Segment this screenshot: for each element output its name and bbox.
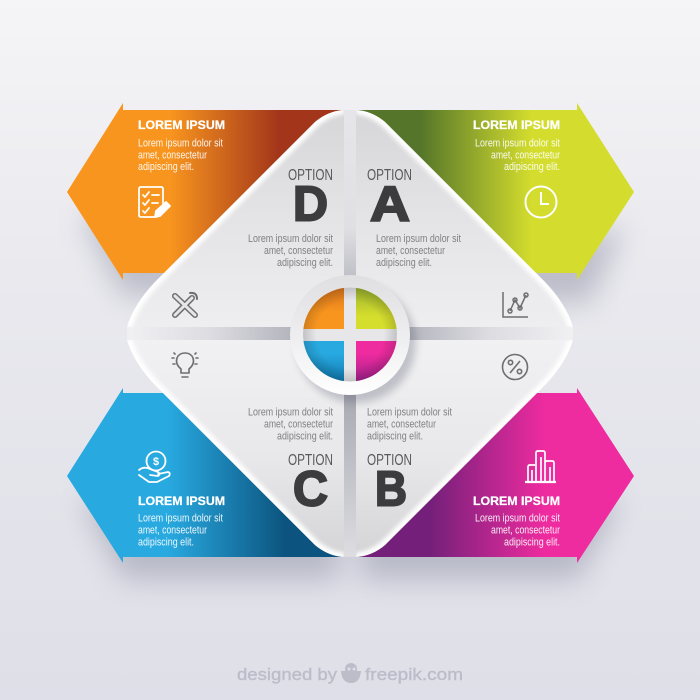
- green arrow text: Lorem ipsum dolor sit: [475, 138, 560, 150]
- card text: adipiscing elit.: [376, 257, 432, 269]
- colored quadrants: [303, 287, 397, 383]
- card shape: [356, 110, 573, 327]
- outer ring: [290, 275, 410, 395]
- magenta arrow text: amet, consectetur: [491, 524, 560, 536]
- card text: Lorem ipsum dolor sit: [367, 406, 452, 418]
- green arrow text: [475, 138, 560, 173]
- panel C: option card: [127, 340, 344, 558]
- option label: OPTION: [288, 452, 333, 469]
- blue arrow shape: [67, 388, 342, 563]
- card text: [376, 233, 461, 269]
- watermark: freepik.com: [365, 665, 463, 684]
- icon: freepik mascot: [341, 663, 361, 683]
- center circle: [290, 275, 416, 403]
- orange arrow shape: [67, 103, 342, 280]
- icon: hand with coin: [139, 452, 170, 482]
- card text: amet, consectetur: [367, 418, 436, 430]
- blue arrow text: Lorem ipsum dolor sit: [138, 512, 223, 524]
- blue arrow text: [138, 512, 223, 548]
- card shape: [127, 110, 344, 327]
- green arrow text: amet, consectetur: [491, 150, 560, 162]
- card text: Lorem ipsum dolor sit: [248, 406, 333, 418]
- card text: [248, 406, 333, 442]
- panel C: blue arrow: [67, 388, 342, 563]
- icon: checklist: [139, 187, 170, 217]
- watermark: [237, 663, 463, 684]
- icon: hand with coin: $: [153, 456, 159, 468]
- orange arrow heading: LOREM IPSUM: [138, 118, 225, 132]
- card text: Lorem ipsum dolor sit: [376, 233, 461, 245]
- icon: clock: [526, 186, 556, 218]
- option label: OPTION: [288, 167, 333, 184]
- magenta arrow text: [475, 512, 560, 548]
- letter A: A: [370, 178, 410, 232]
- green arrow text: adipiscing elit.: [504, 161, 560, 173]
- icon: line chart: [503, 292, 528, 317]
- card text: amet, consectetur: [376, 245, 445, 257]
- orange arrow text: adipiscing elit.: [138, 161, 194, 173]
- orange arrow text: Lorem ipsum dolor sit: [138, 138, 223, 150]
- panel A: green arrow: [358, 103, 634, 280]
- card text: amet, consectetur: [264, 418, 333, 430]
- panel B: option card: [356, 340, 573, 558]
- card text: adipiscing elit.: [367, 430, 423, 442]
- card shape: [356, 340, 573, 557]
- magenta arrow text: Lorem ipsum dolor sit: [475, 512, 560, 524]
- disc base and cross: [303, 288, 397, 382]
- letter B: B: [375, 462, 407, 516]
- card text: [248, 233, 333, 269]
- panel D: option card: [127, 109, 344, 327]
- card text: Lorem ipsum dolor sit: [248, 233, 333, 245]
- center strips: [127, 110, 573, 557]
- panel D: orange arrow: [67, 103, 342, 280]
- icon: tools: [175, 293, 197, 315]
- icon: bar chart: [525, 451, 556, 482]
- panel A: option card: [356, 109, 573, 327]
- card shape: [127, 340, 344, 557]
- magenta arrow shape: [358, 388, 634, 563]
- letter C: C: [293, 462, 328, 516]
- green arrow shape: [358, 103, 634, 280]
- orange arrow text: [138, 138, 223, 173]
- card text: amet, consectetur: [264, 245, 333, 257]
- orange arrow text: amet, consectetur: [138, 150, 207, 162]
- soft shadows: [80, 215, 625, 580]
- blue arrow text: amet, consectetur: [138, 524, 207, 536]
- letter D: D: [293, 178, 328, 232]
- option label: OPTION: [367, 167, 412, 184]
- card text: adipiscing elit.: [277, 257, 333, 269]
- magenta arrow text: adipiscing elit.: [504, 536, 560, 548]
- blue arrow text: adipiscing elit.: [138, 536, 194, 548]
- blue arrow heading: LOREM IPSUM: [138, 494, 225, 508]
- card text: [367, 406, 452, 442]
- ring shadow: [296, 283, 416, 403]
- icon: percent: [502, 354, 528, 380]
- magenta arrow heading: LOREM IPSUM: [473, 494, 560, 508]
- option label: OPTION: [367, 452, 412, 469]
- panel B: magenta arrow: [358, 388, 634, 563]
- icon: light bulb: [172, 353, 198, 377]
- green arrow heading: LOREM IPSUM: [473, 118, 560, 132]
- card text: adipiscing elit.: [277, 430, 333, 442]
- watermark: designed by: [237, 665, 338, 684]
